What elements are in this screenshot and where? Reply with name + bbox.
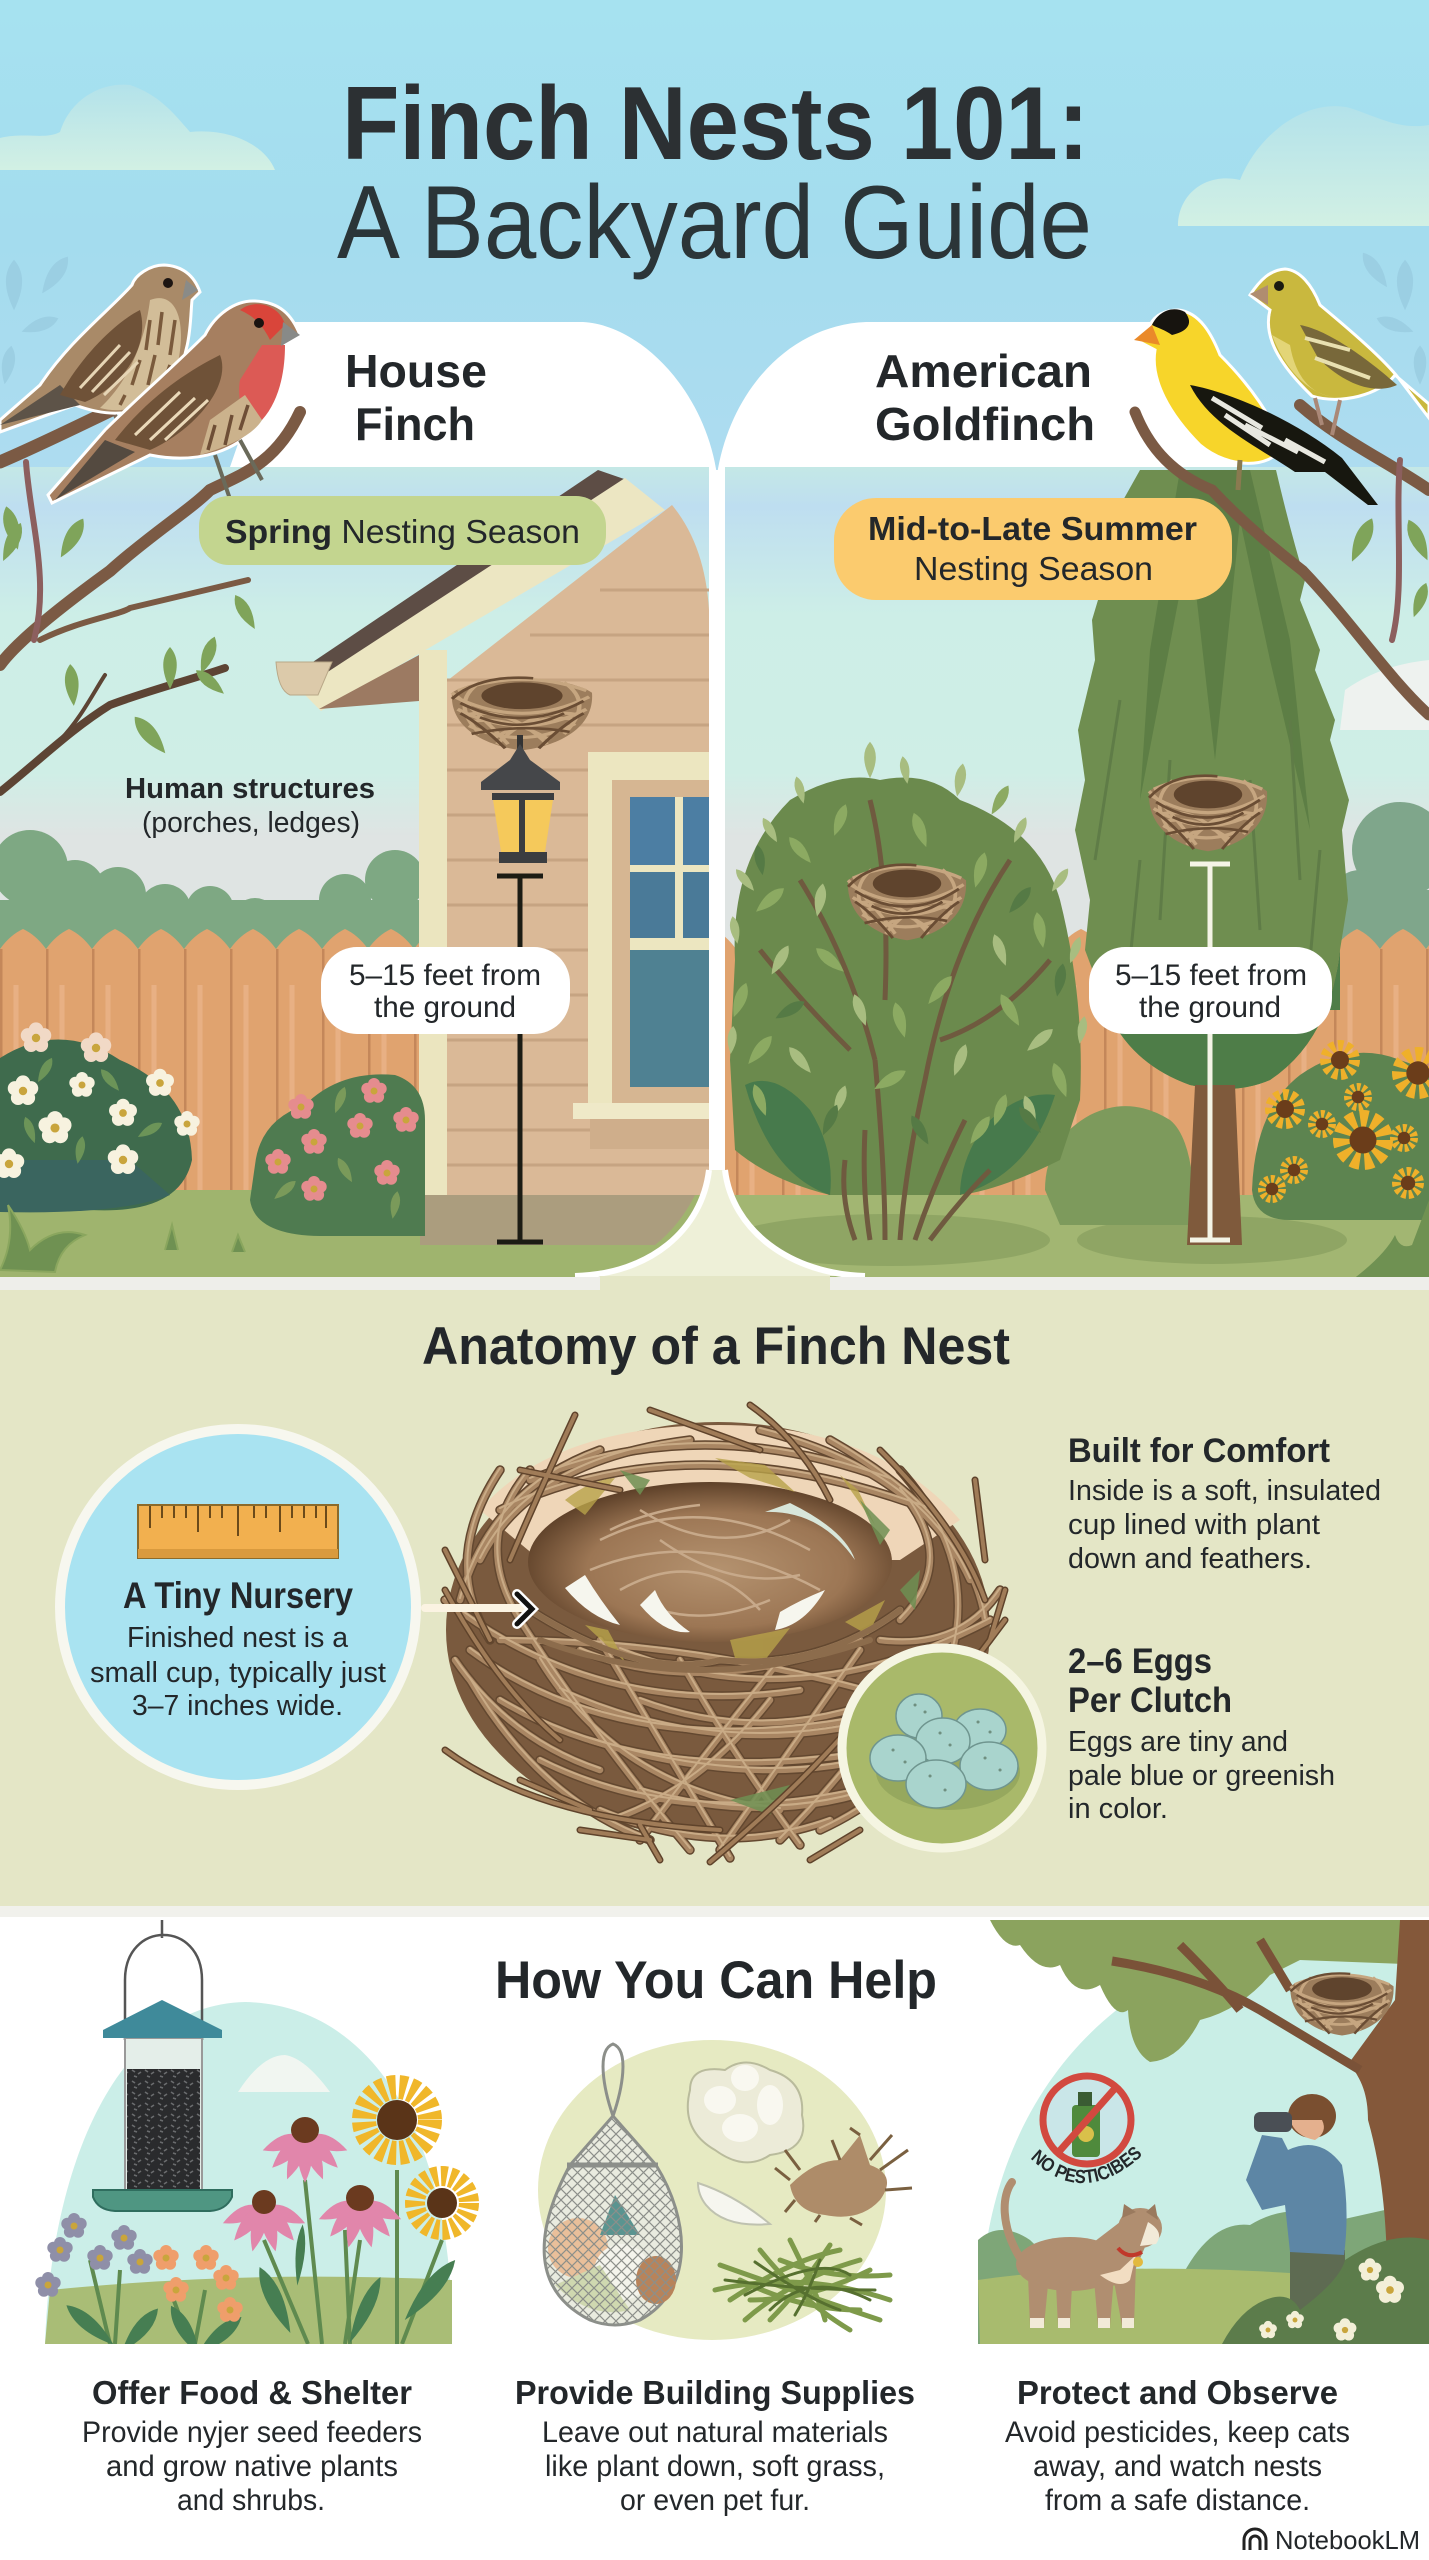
panel: how you can help	[0, 1906, 1429, 2555]
dome backdrop	[980, 1960, 1429, 2344]
nest in tree	[1290, 1973, 1394, 2035]
tip: protect and observe: Protect and Observe	[1017, 2374, 1338, 2411]
pet fur	[775, 2128, 912, 2225]
sunflower bush	[1252, 1046, 1429, 1220]
vignette: food and shelter	[35, 1920, 469, 2359]
soft grass	[715, 2240, 890, 2330]
built for comfort text	[1068, 1432, 1381, 1575]
vignette: building supplies	[538, 2040, 912, 2340]
summer season pill: Mid-to-Late Summer	[868, 510, 1197, 547]
goldfinch heading: Goldfinch	[875, 398, 1095, 450]
tip: offer food and shelter	[82, 2374, 422, 2517]
grass tuft right	[1352, 1200, 1429, 1280]
small shrub	[1045, 1106, 1195, 1225]
lawn right	[725, 1195, 1429, 1280]
siding lines	[447, 590, 709, 1165]
vignette: protect and observe	[978, 1920, 1429, 2344]
house finch heading: Finch	[355, 398, 475, 450]
corner trim	[419, 650, 447, 1195]
height label house finch: 5–15 feet from	[349, 959, 541, 992]
left branch leaves	[0, 504, 260, 758]
summer season pill	[834, 498, 1232, 600]
eggs per clutch text: Eggs are tiny and	[1068, 1726, 1288, 1758]
vignette clouds	[238, 2055, 330, 2092]
nest in cypress	[1149, 776, 1267, 851]
eggs per clutch text: Per Clutch	[1068, 1681, 1232, 1720]
flower leaves	[62, 2224, 461, 2359]
eggs circle	[842, 1648, 1042, 1848]
no pesticides sign	[1043, 2076, 1131, 2164]
title: Finch Nests 101:	[342, 66, 1089, 182]
human structures note	[125, 773, 375, 839]
nest in shrub	[848, 865, 966, 940]
twigs over cup rim	[530, 1610, 900, 1670]
tip: offer food and shelter: Provide nyjer seed feeders	[82, 2416, 422, 2449]
separator and bottom curve	[575, 470, 865, 1276]
fence right	[725, 925, 1429, 1215]
arrow to nest	[425, 1594, 532, 1624]
roof fascia	[300, 478, 665, 711]
bush pink flowers	[250, 1074, 425, 1236]
panel: sky header	[0, 0, 1429, 1290]
bird: male house finch	[48, 301, 300, 505]
human structures note: Human structures	[125, 773, 375, 805]
house finch heading	[345, 345, 487, 450]
height label goldfinch	[1089, 947, 1332, 1034]
goldfinch heading: American	[875, 345, 1092, 397]
coneflower two	[220, 2190, 308, 2253]
window	[573, 752, 709, 1149]
panel: scene skies	[0, 467, 1429, 1277]
height label goldfinch: 5–15 feet from	[1115, 959, 1307, 992]
height marker	[497, 876, 543, 1242]
nest on wall	[452, 678, 592, 750]
built for comfort text: Built for Comfort	[1068, 1432, 1330, 1470]
tip: provide building supplies: Leave out natural materials	[542, 2416, 888, 2449]
roof shingles	[292, 470, 627, 688]
cloud left	[0, 85, 275, 170]
built for comfort text: cup lined with plant	[1068, 1509, 1320, 1541]
tip: protect and observe	[1005, 2374, 1350, 2517]
anatomy heading: Anatomy of a Finch Nest	[422, 1317, 1010, 1376]
tiny nursery circle: 3–7 inches wide.	[132, 1690, 343, 1722]
bird: female house finch	[0, 265, 200, 450]
bush white flowers	[0, 1022, 200, 1212]
cypress trunk	[1187, 1085, 1242, 1245]
right branch leaves	[1345, 515, 1429, 619]
eggs per clutch text: pale blue or greenish	[1068, 1760, 1335, 1792]
tiny nursery circle	[60, 1429, 416, 1785]
shrub shadow patches	[745, 1081, 1055, 1195]
eggs per clutch text: 2–6 Eggs	[1068, 1642, 1212, 1681]
faded leaves right	[1357, 249, 1426, 385]
title: A Backyard Guide	[337, 165, 1092, 281]
coneflower one	[260, 2117, 350, 2183]
right branches	[1135, 405, 1429, 715]
feather lining	[565, 1503, 855, 1632]
lawn	[978, 2269, 1429, 2344]
nest illustration	[445, 1405, 1005, 1862]
net bag	[544, 2044, 682, 2325]
background cloud right	[1340, 660, 1429, 730]
house finch heading: House	[345, 345, 487, 397]
rim moss	[565, 1458, 885, 1662]
background trees left	[0, 830, 425, 970]
foreground bush	[1222, 2238, 1429, 2344]
help heading: How You Can Help	[495, 1951, 937, 2010]
sunflower small	[415, 2176, 469, 2230]
lantern	[481, 735, 560, 863]
foundation	[420, 1195, 695, 1245]
dome backdrop	[45, 2002, 452, 2344]
height marker	[1190, 864, 1230, 1240]
no pesticides curved text: NO PESTICIBES	[1031, 2147, 1141, 2184]
tip: provide building supplies: Provide Building Supplies	[515, 2374, 915, 2411]
cup lining strokes	[590, 1505, 820, 1616]
nest mass	[446, 1422, 990, 1838]
coneflower three	[316, 2185, 404, 2249]
rim and bowl twigs	[445, 1430, 1000, 1858]
tip: offer food and shelter: Offer Food & Shelter	[92, 2374, 412, 2411]
dome mask between vignettes	[0, 2344, 1429, 2560]
person with binoculars	[1246, 2094, 1347, 2330]
feather	[698, 2183, 770, 2225]
tiny nursery circle: Finished nest is a	[127, 1622, 349, 1654]
built for comfort text: Inside is a soft, insulated	[1068, 1475, 1381, 1507]
human structures note: (porches, ledges)	[142, 807, 360, 839]
tip: provide building supplies: or even pet fur.	[620, 2484, 810, 2517]
tiny nursery text: A Tiny Nursery	[123, 1575, 353, 1616]
ruler icon	[138, 1505, 338, 1558]
panel: house finch scene	[0, 470, 709, 1280]
small purple flowers	[35, 2213, 153, 2297]
house wall	[420, 505, 709, 1195]
height label goldfinch: the ground	[1139, 991, 1281, 1024]
cloud right	[1178, 106, 1429, 226]
built for comfort text: down and feathers.	[1068, 1543, 1312, 1575]
tip: protect and observe: from a safe distance.	[1045, 2484, 1310, 2517]
tip: offer food and shelter: and shrubs.	[177, 2484, 325, 2517]
fine twig highlights	[445, 1428, 1000, 1856]
tip: offer food and shelter: and grow native plants	[106, 2450, 398, 2483]
bird: female goldfinch	[1250, 269, 1429, 435]
faded leaves left	[0, 253, 74, 385]
title	[337, 66, 1092, 281]
foliage	[990, 1920, 1429, 2062]
height label house finch: the ground	[374, 991, 516, 1024]
small orange flowers	[153, 2245, 243, 2322]
large shrub	[726, 742, 1089, 1240]
flower stems	[90, 2170, 442, 2344]
soffit	[319, 655, 419, 709]
spring season pill	[199, 496, 606, 565]
panel: american goldfinch scene	[725, 470, 1429, 1280]
background trees right	[1330, 802, 1429, 960]
panel: white species headers	[230, 322, 1240, 560]
summer season pill: Nesting Season	[914, 550, 1153, 587]
tip: protect and observe: away, and watch nests	[1033, 2450, 1322, 2483]
tree trunk	[1349, 1920, 1429, 2344]
spiky outer twigs	[445, 1405, 1005, 1862]
tip: provide building supplies	[515, 2374, 915, 2517]
eggs per clutch text	[1068, 1642, 1335, 1825]
gutter	[276, 662, 332, 695]
cypress tree	[1075, 470, 1349, 1245]
notebooklm mark: NotebookLM	[1275, 2525, 1420, 2555]
cotton plant down	[688, 2062, 803, 2162]
background trees	[978, 2200, 1429, 2344]
nest cup	[528, 1482, 892, 1642]
tiny nursery circle: small cup, typically just	[90, 1657, 386, 1689]
spring season pill: Spring Nesting Season	[225, 513, 580, 550]
fence left	[0, 925, 425, 1215]
bird: male goldfinch	[1134, 309, 1378, 505]
panel: anatomy of a finch nest	[0, 1276, 1429, 1906]
sunflower large	[364, 2087, 430, 2153]
eggs per clutch text: in color.	[1068, 1793, 1168, 1825]
vignette ground	[45, 2277, 452, 2344]
lawn left	[0, 1190, 709, 1280]
band between sections	[0, 1277, 1429, 1292]
height label house finch	[321, 947, 570, 1034]
seed feeder	[93, 1920, 232, 2211]
grass tufts	[0, 1205, 245, 1272]
goldfinch heading	[875, 345, 1095, 450]
tip: protect and observe: Avoid pesticides, keep cats	[1005, 2416, 1350, 2449]
circle backdrop	[538, 2040, 886, 2340]
tip: provide building supplies: like plant down, soft grass,	[545, 2450, 885, 2483]
cat	[1005, 2182, 1162, 2328]
tree branches	[1112, 1940, 1360, 2070]
left branches	[0, 405, 300, 792]
green moss	[620, 1470, 920, 1815]
